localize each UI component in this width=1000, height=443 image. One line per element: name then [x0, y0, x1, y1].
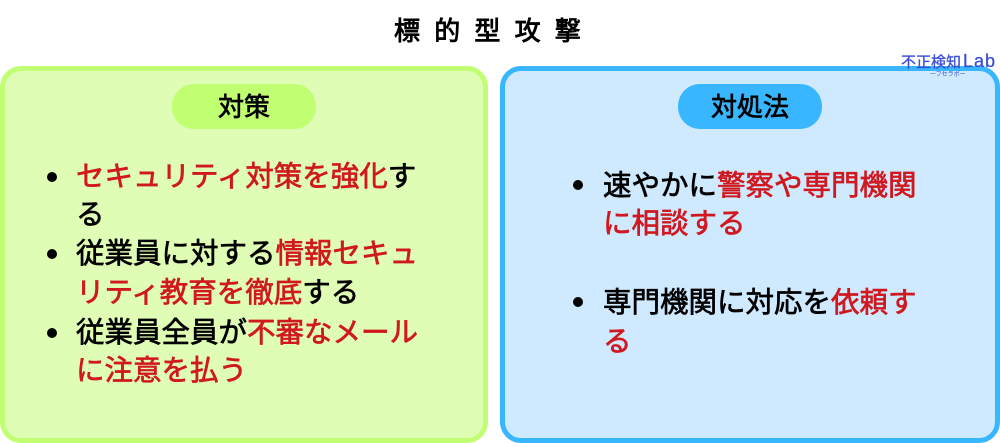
text line: る [603, 326, 632, 358]
logo watermark [901, 51, 996, 78]
bullet marker 1 [573, 180, 583, 190]
text line: る [76, 199, 105, 231]
panel background [0, 66, 488, 443]
text line: に相談する [603, 208, 746, 240]
heading: response: 対処法 [711, 92, 789, 122]
bullet list: countermeasures [47, 161, 418, 387]
title: 標的型攻撃 [394, 16, 595, 46]
bullet marker 2 [47, 249, 57, 259]
text line: 速やかに警察や専門機関 [603, 170, 917, 202]
bullet marker 3 [47, 328, 57, 338]
text line: リティ教育を徹底する [76, 277, 359, 309]
bullet marker 2 [573, 297, 583, 307]
text line: 従業員全員が不審なメール [76, 317, 418, 349]
text line: 従業員に対する情報セキュ [76, 238, 418, 270]
text line: 専門機関に対応を依頼す [603, 287, 917, 319]
text line: に注意を払う [76, 355, 247, 387]
text line: セキュリティ対策を強化す [76, 161, 416, 193]
logo subtitle: ーフセラボー [930, 72, 966, 78]
heading: countermeasures [172, 84, 316, 129]
panel background [500, 66, 1000, 443]
heading: countermeasures: 対策 [218, 92, 270, 122]
heading: response [678, 84, 822, 129]
panel: response [500, 66, 1000, 443]
bullet list: response [573, 170, 917, 358]
panel: countermeasures [0, 66, 488, 443]
bullet marker 1 [47, 172, 57, 182]
logo name: 不正検知Lab [901, 51, 996, 71]
